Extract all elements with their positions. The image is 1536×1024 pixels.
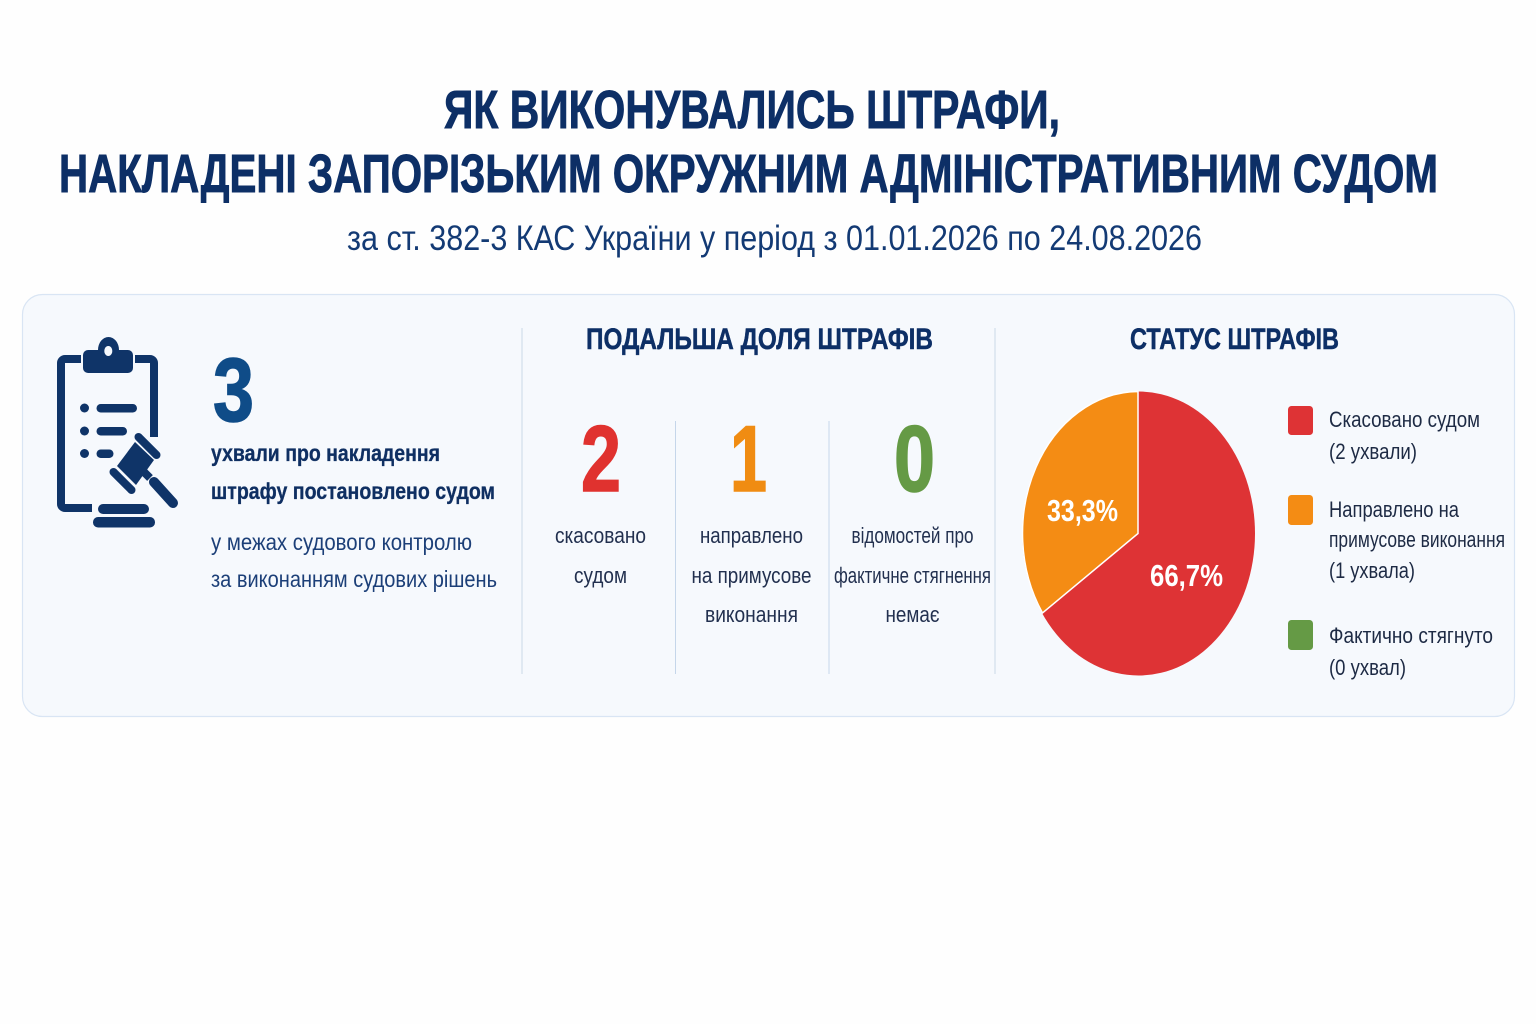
stat: collected: фактичне стягнення	[834, 563, 991, 588]
text: rulings description: штрафу постановлено судом	[211, 478, 495, 504]
legend: (1 ухвала)	[1329, 558, 1415, 583]
text: rulings description: ухвали про накладення	[211, 440, 440, 466]
pie chart: 33,3%	[1047, 493, 1118, 528]
subtitle: за ст. 382-3 КАС України у період з 01.01.2026 по 24.08.2026	[347, 219, 1202, 258]
stat: enforcement: на примусове	[692, 563, 812, 588]
legend: (0 ухвал)	[1329, 655, 1406, 680]
stat: collected: немає	[886, 602, 940, 627]
text: judicial control note: у межах судового контролю	[211, 529, 472, 555]
stat: collected: відомостей про	[852, 523, 974, 548]
legend: Скасовано судом	[1329, 407, 1480, 432]
text: rulings description	[211, 440, 495, 504]
title: ЯК ВИКОНУВАЛИСЬ ШТРАФИ,	[444, 80, 1060, 140]
stat: enforcement: 1	[730, 406, 767, 511]
panel: main card	[22, 294, 1514, 716]
stat: enforcement	[692, 406, 812, 627]
heading: status: СТАТУС ШТРАФІВ	[1130, 323, 1339, 356]
stat: enforcement: виконання	[705, 602, 798, 627]
heading: further fate: ПОДАЛЬША ДОЛЯ ШТРАФІВ	[586, 323, 933, 356]
icon: clipboard with gavel	[61, 337, 173, 528]
text: judicial control note	[211, 529, 497, 592]
legend: Направлено на	[1329, 497, 1459, 522]
pie chart: 66,7%	[1150, 558, 1223, 593]
title	[59, 80, 1438, 204]
stat: collected: 0	[894, 406, 935, 511]
stat: cancelled: 2	[581, 406, 621, 511]
big number 3: 3	[213, 341, 254, 441]
legend	[1288, 406, 1505, 680]
legend: Фактично стягнуто	[1329, 623, 1493, 648]
stat: cancelled: скасовано	[555, 523, 646, 548]
stat: cancelled	[555, 406, 646, 588]
stat: enforcement: направлено	[700, 523, 803, 548]
legend: (2 ухвали)	[1329, 439, 1417, 464]
pie chart	[1022, 392, 1255, 676]
text: judicial control note: за виконанням судових рішень	[211, 566, 497, 592]
stat: collected	[834, 406, 991, 627]
stat: cancelled: судом	[574, 563, 627, 588]
